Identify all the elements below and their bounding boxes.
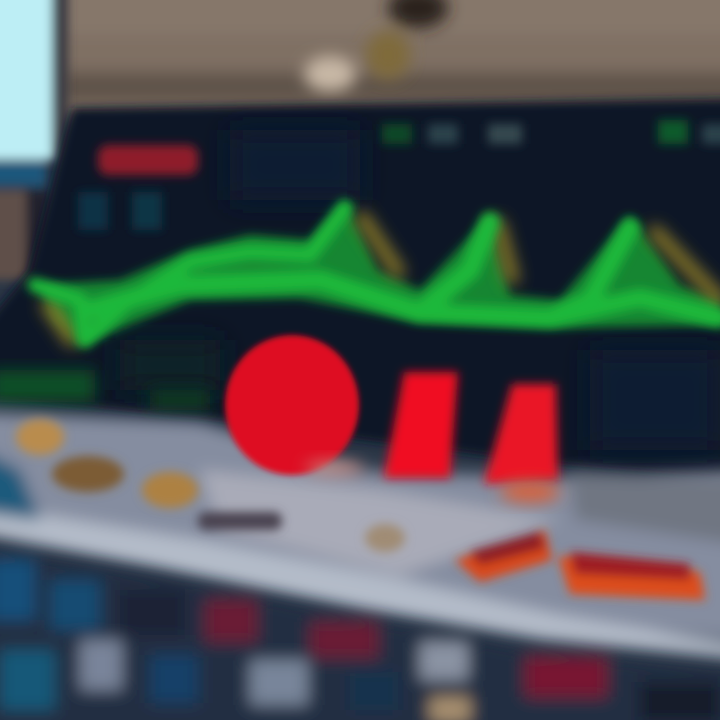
coins at left — [16, 419, 405, 552]
icon: red bar one — [384, 372, 458, 478]
chart: green line with amber accents — [35, 200, 720, 345]
bright green line — [35, 208, 720, 340]
screen header labels — [78, 120, 720, 230]
orange glow at bar feet — [305, 462, 560, 502]
keyboard lower dark keys — [0, 545, 720, 720]
red keys on keyboard — [455, 530, 705, 600]
monitor screen — [0, 98, 720, 480]
screen panels — [120, 130, 720, 450]
window at left — [0, 0, 68, 280]
keyboard base — [0, 412, 720, 660]
lower left green glow — [0, 370, 210, 410]
amber shadow strokes — [48, 218, 720, 340]
icon: red bar two — [484, 384, 558, 484]
dark green fill under the line — [40, 200, 720, 345]
icon: large red circle — [225, 335, 359, 475]
objects on top edge — [304, 0, 448, 92]
background wall — [0, 0, 720, 120]
